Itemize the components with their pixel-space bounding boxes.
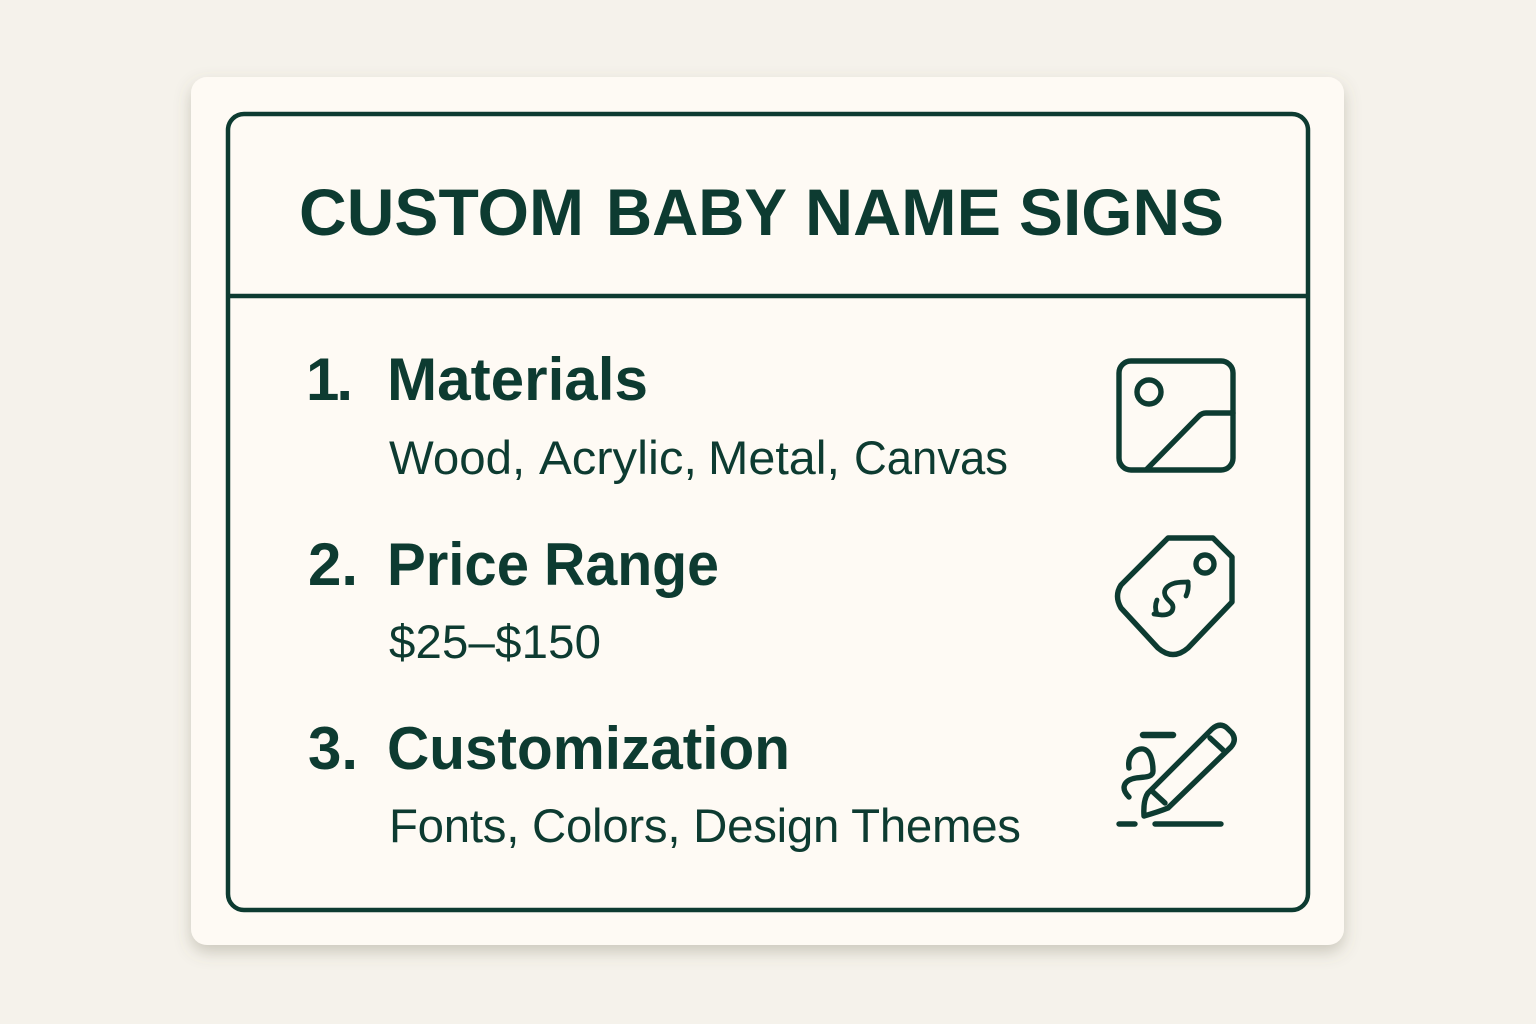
description: materials: Canvas — [854, 432, 1008, 485]
number 3: 3. — [308, 715, 358, 782]
title — [299, 175, 1224, 249]
description: materials: Metal, — [708, 432, 840, 485]
description: materials — [389, 432, 1008, 485]
heading: materials: Materials — [387, 346, 648, 413]
title: SIGNS — [1019, 175, 1224, 249]
icon: image — [1119, 361, 1233, 470]
description: materials: Wood, — [389, 432, 525, 485]
icon: price tag — [1118, 538, 1232, 654]
description: customization: Fonts, Colors, Design Themes — [389, 800, 1021, 853]
number 1: 1. — [306, 346, 350, 413]
heading: price range: Range — [544, 531, 719, 598]
card — [191, 77, 1344, 945]
title: NAME — [805, 175, 1001, 249]
description: materials: Acrylic, — [539, 432, 697, 485]
heading: customization: Customization — [387, 715, 790, 782]
item 2: price range — [308, 531, 719, 669]
icon: pencil writing — [1119, 725, 1234, 824]
title: CUSTOM — [299, 175, 584, 249]
title: BABY — [606, 175, 787, 249]
description: price range: $25–$150 — [389, 616, 601, 669]
item 1: materials — [306, 346, 1008, 485]
heading: price range — [387, 531, 719, 598]
inner frame — [228, 114, 1308, 910]
number 2: 2. — [308, 531, 358, 598]
heading: price range: Price — [387, 531, 529, 598]
item 3: customization — [308, 715, 1021, 853]
